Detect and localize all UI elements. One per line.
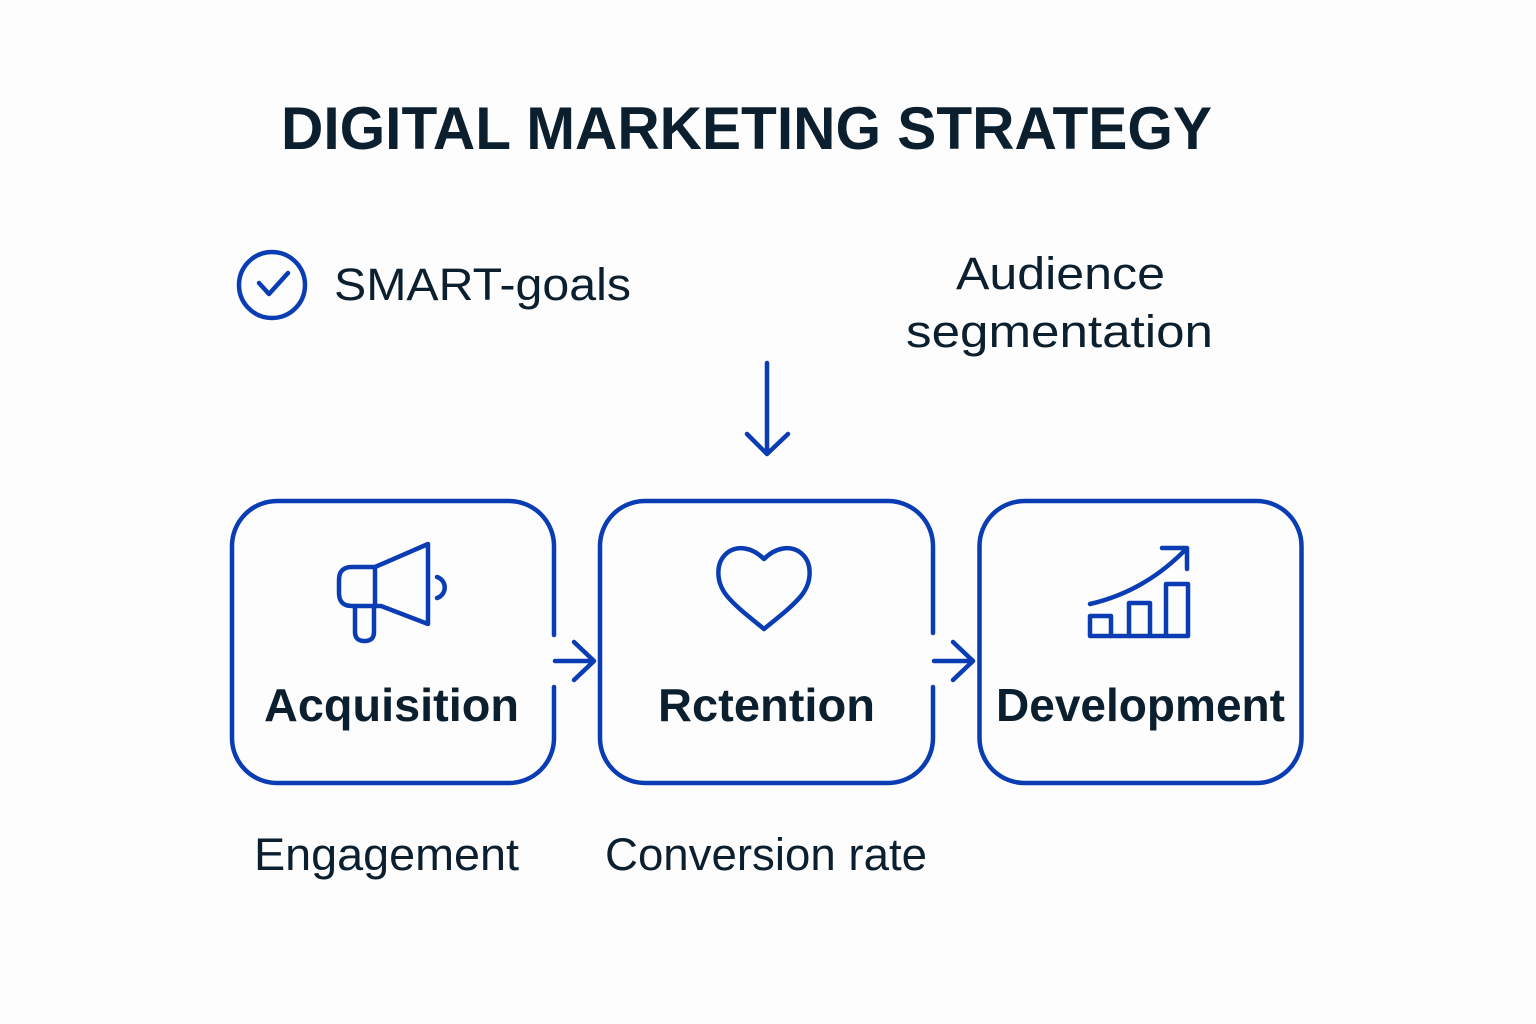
- acquisition label: Acquisition: [264, 679, 519, 731]
- icon: check circle: [239, 252, 305, 318]
- arrow: down into retention: [747, 363, 788, 454]
- conversion rate label: Conversion rate: [605, 829, 927, 880]
- SMART-goals label: SMART-goals: [334, 259, 631, 310]
- engagement label: Engagement: [254, 829, 520, 880]
- icon: megaphone: [339, 544, 445, 641]
- audience segmentation label: [906, 248, 1213, 357]
- icon: heart: [718, 548, 810, 629]
- title: DIGITAL MARKETING STRATEGY: [281, 95, 1212, 162]
- icon: growth chart: [1090, 548, 1188, 636]
- box outline: [232, 501, 554, 783]
- panel: acquisition: [232, 501, 554, 783]
- development label: Development: [996, 679, 1285, 731]
- panel: development: [980, 501, 1302, 783]
- audience segmentation label: segmentation: [906, 306, 1213, 357]
- panel: retention: [600, 501, 933, 783]
- SMART-goals item: [239, 252, 631, 318]
- arrow: retention to development: [934, 642, 973, 680]
- box outline: [600, 501, 933, 783]
- arrow: acquisition to retention: [555, 642, 594, 680]
- audience segmentation label: Audience: [956, 248, 1165, 299]
- retention label: Rctention: [658, 679, 875, 731]
- box outline: [980, 501, 1302, 783]
